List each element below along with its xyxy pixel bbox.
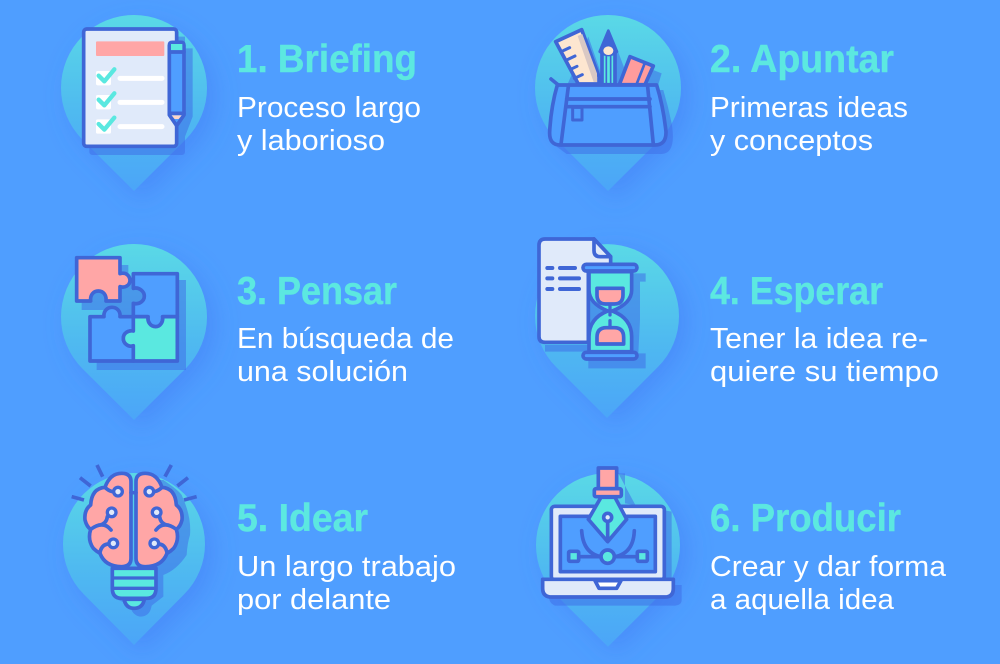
description 1: y laborioso	[237, 125, 385, 157]
description 5: por delante	[237, 584, 391, 616]
pin 2	[535, 15, 689, 200]
title 6: 6. Producir	[710, 497, 901, 540]
pin 4	[535, 244, 687, 425]
description 3	[237, 323, 454, 388]
pin 5	[63, 473, 213, 653]
pin 1	[61, 15, 215, 200]
step 3: pensar	[61, 244, 454, 428]
icon: checklist and pencil	[84, 29, 193, 155]
description 4	[710, 323, 939, 388]
description 4: Tener la idea re-	[710, 323, 928, 355]
title 3: 3. Pensar	[237, 270, 397, 313]
icon: puzzle	[77, 258, 186, 370]
description 3: En búsqueda de	[237, 323, 454, 355]
icon: pencil case	[550, 30, 673, 154]
step 1: briefing	[61, 15, 421, 200]
title 2: 2. Apuntar	[710, 38, 894, 81]
title 4: 4. Esperar	[710, 270, 883, 313]
icon: brain light bulb	[72, 465, 197, 617]
step 5: idear	[63, 465, 456, 653]
pin 6	[536, 473, 688, 654]
step 4: esperar	[535, 239, 939, 425]
step 2: apuntar	[535, 15, 908, 200]
description 4: quiere su tiempo	[710, 356, 939, 388]
step 6: producir	[536, 468, 947, 654]
pin 3	[61, 244, 215, 428]
description 1: Proceso largo	[237, 92, 421, 124]
description 6: a aquella idea	[710, 584, 895, 616]
description 3: una solución	[237, 356, 408, 388]
description 1	[237, 92, 421, 157]
icon: laptop and pen tool	[543, 468, 682, 606]
description 6	[710, 551, 947, 616]
description 6: Crear y dar forma	[710, 551, 947, 583]
icon: document and hourglass	[539, 239, 646, 368]
description 2: Primeras ideas	[710, 92, 908, 124]
description 2: y conceptos	[710, 125, 873, 157]
description 5	[237, 551, 456, 616]
title 5: 5. Idear	[237, 497, 368, 540]
title 1: 1. Briefing	[237, 38, 417, 81]
description 5: Un largo trabajo	[237, 551, 456, 583]
description 2	[710, 92, 908, 157]
